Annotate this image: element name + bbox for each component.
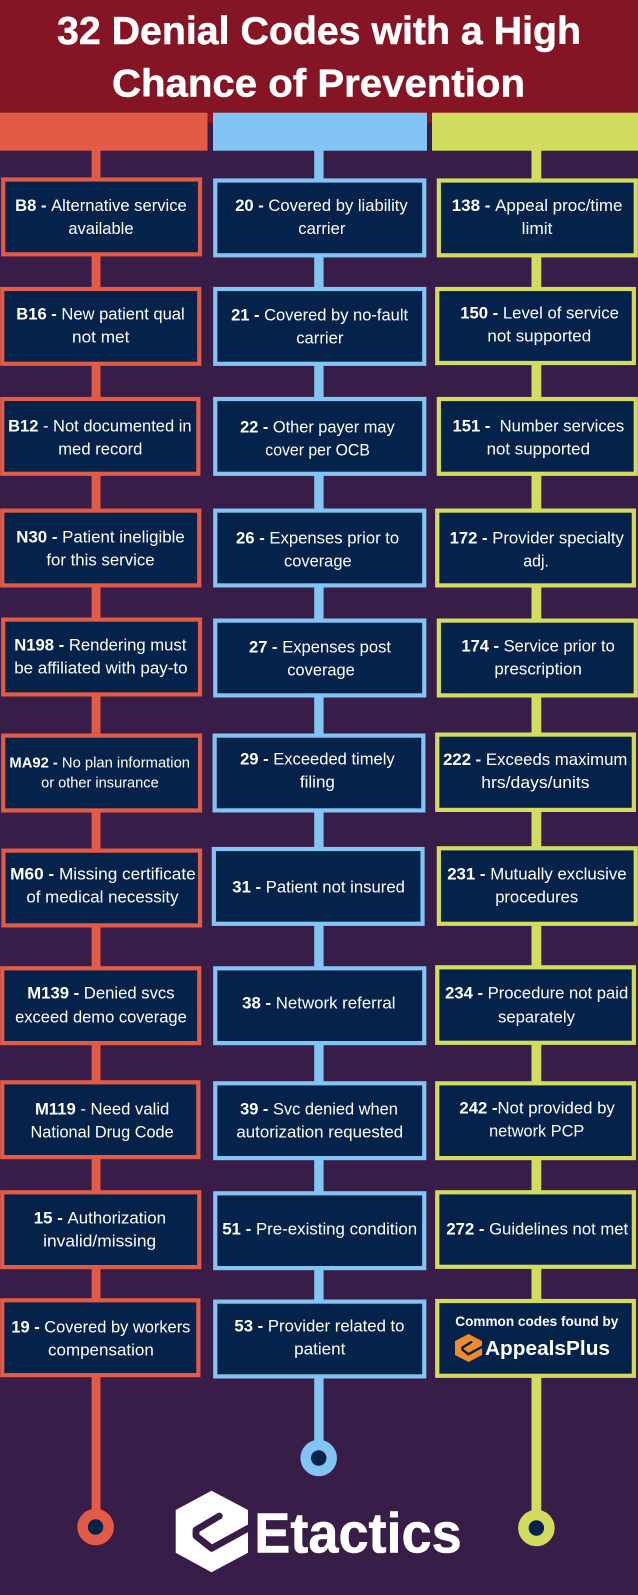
box: 27: 27 - Expenses post bbox=[249, 638, 391, 657]
box: N30 bbox=[2, 511, 199, 585]
box: 138: 138 - Appeal proc/time bbox=[452, 196, 622, 215]
box: 172: adj. bbox=[523, 551, 549, 570]
box: B12: med record bbox=[58, 439, 142, 458]
panel: green column bbox=[437, 150, 636, 1541]
panel: red column bbox=[2, 150, 200, 1540]
logo: Etactics: Etactics bbox=[254, 1502, 462, 1566]
box: 53: patient bbox=[294, 1339, 346, 1358]
box: N30: N30 - Patient ineligible bbox=[16, 527, 185, 546]
box: 272: 272 - Guidelines not met bbox=[446, 1219, 628, 1238]
box: M139: exceed demo coverage bbox=[15, 1007, 187, 1026]
box: 174: prescription bbox=[494, 660, 582, 679]
box: 174 bbox=[439, 621, 636, 695]
box: M119 bbox=[2, 1082, 198, 1157]
logo: Etactics bbox=[176, 1491, 462, 1572]
box: 38 bbox=[215, 968, 424, 1043]
box: 242: network PCP bbox=[489, 1121, 584, 1140]
box: 53: 53 - Provider related to bbox=[234, 1316, 404, 1335]
box: 272 bbox=[437, 1192, 634, 1267]
box: 231 bbox=[439, 848, 636, 924]
box: 19: compensation bbox=[48, 1340, 154, 1359]
box: N198: be affiliated with pay-to bbox=[14, 658, 188, 677]
box: 138 bbox=[439, 180, 636, 255]
box: B16: B16 - New patient qual bbox=[16, 304, 185, 323]
box: 29 bbox=[215, 736, 423, 810]
box: M119: M119 - Need valid bbox=[35, 1099, 169, 1118]
box: 20: 20 - Covered by liability bbox=[235, 196, 408, 215]
box: 242 bbox=[437, 1083, 634, 1158]
box: 150 bbox=[437, 289, 634, 363]
box: 20 bbox=[215, 180, 424, 255]
column header bar: red bbox=[0, 113, 208, 151]
box: B8: available bbox=[68, 219, 134, 238]
box: 22: 22 - Other payer may bbox=[240, 417, 395, 436]
box: M60: of medical necessity bbox=[26, 887, 179, 906]
box: 234: 234 - Procedure not paid bbox=[445, 983, 628, 1002]
panel: blue column bbox=[214, 150, 424, 1471]
box: 234: separately bbox=[498, 1007, 575, 1026]
box: 19: 19 - Covered by workers bbox=[11, 1317, 190, 1336]
box: N198 bbox=[3, 620, 200, 694]
box: 21: carrier bbox=[296, 328, 344, 347]
box: 38: 38 - Network referral bbox=[242, 993, 396, 1012]
box: B12 bbox=[2, 399, 198, 474]
icon: Etactics hexagon bbox=[176, 1491, 248, 1572]
box: MA92: or other insurance bbox=[41, 776, 159, 792]
box: 51: 51 - Pre-existing condition bbox=[222, 1219, 417, 1238]
timeline connector: green bbox=[523, 150, 549, 1541]
box: 26: coverage bbox=[284, 551, 352, 570]
title: 32 Denial Codes with a High bbox=[57, 10, 581, 53]
box: 231: procedures bbox=[495, 887, 578, 906]
box: 231: 231 - Mutually exclusive bbox=[447, 864, 627, 883]
box: 27 bbox=[215, 621, 424, 695]
box: 15 bbox=[2, 1192, 199, 1267]
box: 151 bbox=[439, 399, 636, 474]
box: AppealsPlus credit bbox=[437, 1301, 634, 1376]
header banner bbox=[0, 0, 638, 123]
box: 51 bbox=[215, 1193, 424, 1268]
box: M139: M139 - Denied svcs bbox=[27, 983, 175, 1002]
box: M60: M60 - Missing certificate bbox=[10, 864, 196, 883]
timeline connector: blue bbox=[306, 150, 332, 1471]
box: N30: for this service bbox=[46, 550, 155, 569]
icon: AppealsPlus hexagon bbox=[455, 1334, 482, 1362]
box: 39: autorization requested bbox=[236, 1122, 403, 1141]
box: 27: coverage bbox=[287, 661, 355, 680]
box: 31 bbox=[214, 849, 423, 924]
box: 21 bbox=[215, 289, 424, 364]
box: M139 bbox=[2, 968, 199, 1043]
box: 31: 31 - Patient not insured bbox=[232, 877, 405, 896]
box: AppealsPlus credit: Common codes found by bbox=[455, 1313, 619, 1329]
box: 19 bbox=[2, 1300, 198, 1375]
box: 15: invalid/missing bbox=[43, 1231, 156, 1250]
box: M119: National Drug Code bbox=[30, 1122, 174, 1141]
box: 22: cover per OCB bbox=[265, 440, 370, 459]
box: 21: 21 - Covered by no-fault bbox=[231, 305, 408, 324]
box: 222: hrs/days/units bbox=[481, 773, 590, 792]
box: MA92 bbox=[3, 736, 200, 810]
box: 39 bbox=[215, 1083, 424, 1158]
box: 29: filing bbox=[300, 772, 335, 791]
box: 234 bbox=[437, 967, 634, 1043]
box: N198: N198 - Rendering must bbox=[14, 636, 187, 655]
box: 150: not supported bbox=[487, 326, 591, 345]
box: 29: 29 - Exceeded timely bbox=[240, 749, 395, 768]
box: 222 bbox=[437, 735, 634, 810]
column header bar: blue bbox=[213, 113, 427, 151]
box: 222: 222 - Exceeds maximum bbox=[443, 750, 627, 769]
box: 150: 150 - Level of service bbox=[460, 303, 619, 322]
box: B16 bbox=[2, 289, 199, 364]
box: 242: 242 -Not provided by bbox=[459, 1098, 615, 1117]
box: B8: B8 - Alternative service bbox=[15, 196, 187, 215]
box: 15: 15 - Authorization bbox=[34, 1208, 166, 1227]
box: B16: not met bbox=[72, 327, 130, 346]
timeline connector: red bbox=[83, 150, 109, 1540]
box: M60 bbox=[3, 851, 200, 925]
box: B12: B12 - Not documented in bbox=[8, 416, 192, 435]
box: 53 bbox=[215, 1302, 424, 1376]
column header bar: green bbox=[432, 113, 638, 151]
title: Chance of Prevention bbox=[112, 63, 525, 106]
box: 26: 26 - Expenses prior to bbox=[236, 528, 399, 547]
box: 39: 39 - Svc denied when bbox=[240, 1099, 398, 1118]
box: 20: carrier bbox=[298, 219, 346, 238]
box: 26 bbox=[215, 511, 424, 585]
box: 172: 172 - Provider specialty bbox=[450, 528, 624, 547]
box: 151: not supported bbox=[487, 439, 590, 458]
box: MA92: MA92 - No plan information bbox=[9, 756, 190, 772]
box: 22 bbox=[215, 399, 424, 474]
box: 172 bbox=[437, 511, 634, 585]
box: AppealsPlus credit: AppealsPlus bbox=[485, 1337, 610, 1360]
box: 174: 174 - Service prior to bbox=[461, 637, 615, 656]
box: 138: limit bbox=[522, 219, 553, 238]
title bbox=[57, 10, 581, 106]
box: B8 bbox=[3, 180, 200, 254]
box: 151: 151 - Number services bbox=[452, 416, 624, 435]
